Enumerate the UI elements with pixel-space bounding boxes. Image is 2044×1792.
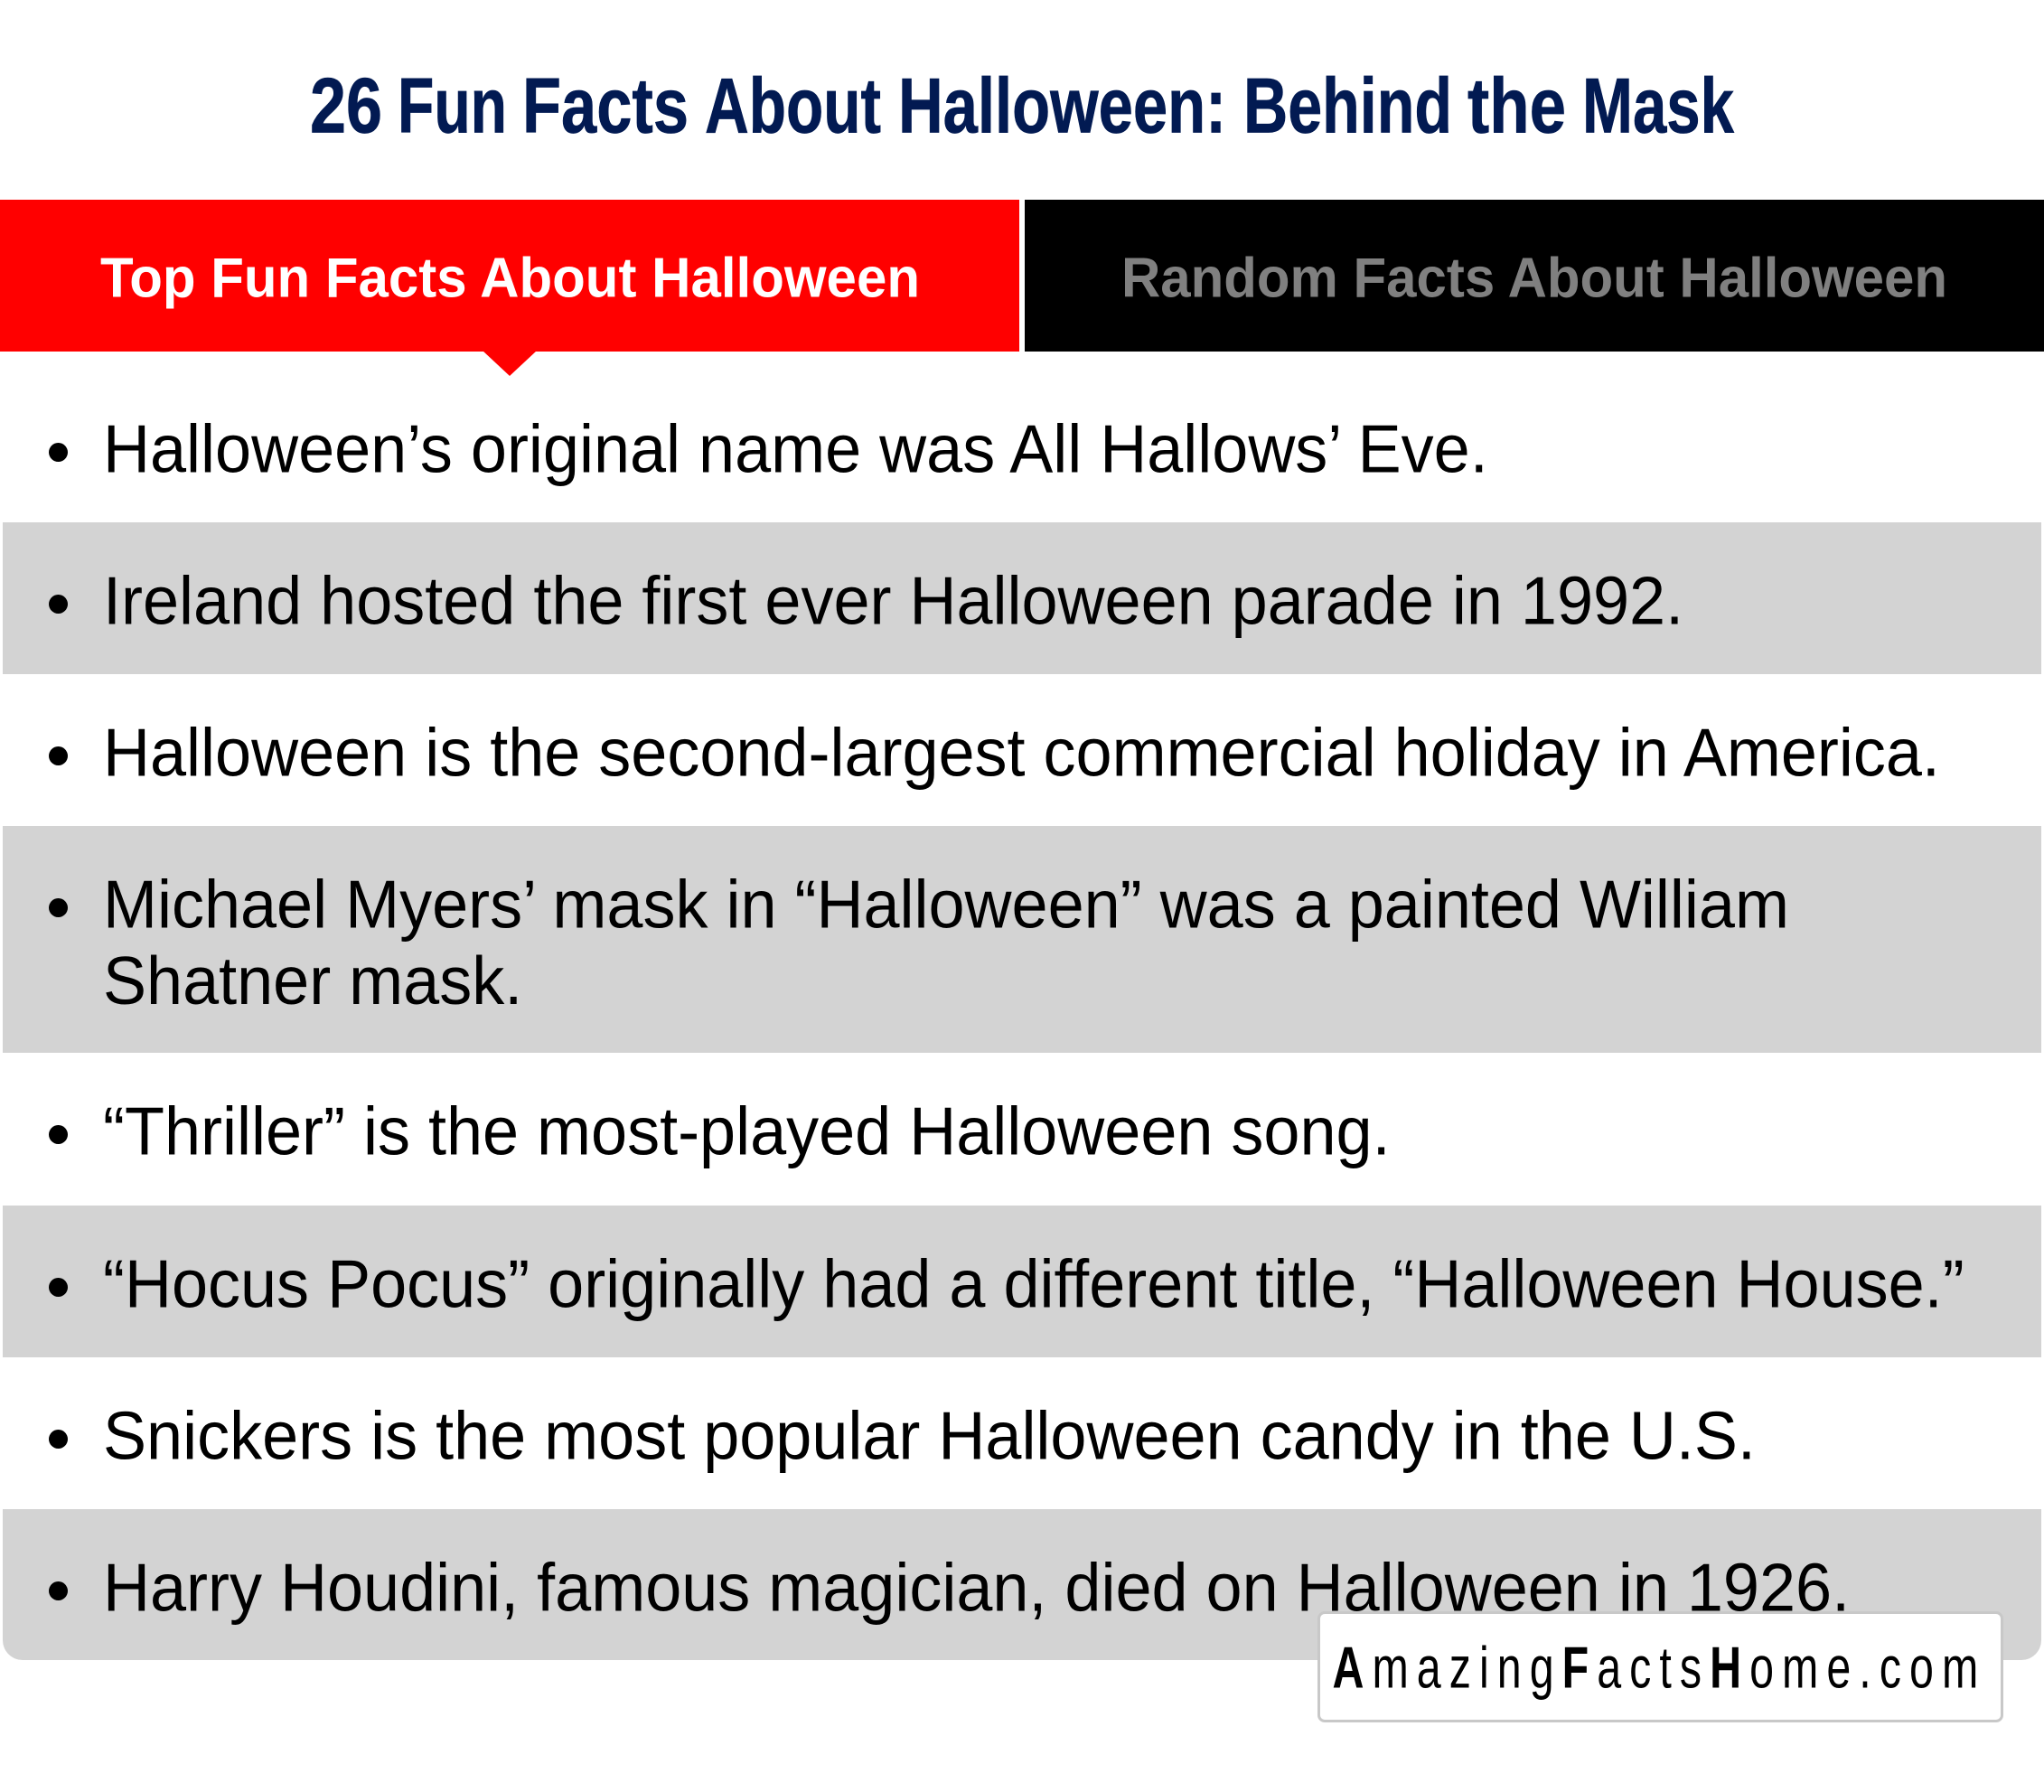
title: the xyxy=(1467,63,1566,150)
fact 7: Snickers is the most popular Halloween candy in the U.S. xyxy=(103,1399,1756,1474)
watermark badge: AmazingFactsHome.com xyxy=(1332,1635,1986,1701)
title: Mask xyxy=(1582,63,1734,150)
tab: random facts (inactive): Random Facts About Halloween xyxy=(1121,246,1947,309)
title: About xyxy=(705,63,881,150)
title: 26 xyxy=(310,63,382,150)
fact 4: Michael Myers’ mask in “Halloween” was a painted William xyxy=(103,868,1789,943)
title: Halloween: xyxy=(898,63,1226,150)
fact 4 xyxy=(49,868,1789,1018)
tab: top fun facts (active): Top Fun Facts About Halloween xyxy=(100,246,920,309)
title: Behind xyxy=(1243,63,1452,150)
fact 1: Halloween’s original name was All Hallows’ Eve. xyxy=(103,412,1488,487)
watermark badge xyxy=(1317,1610,2003,1722)
fact 3: Halloween is the second-largest commercial holiday in America. xyxy=(103,716,1940,791)
row background: fact 6 xyxy=(3,1206,2041,1357)
tab pointer arrow xyxy=(483,351,537,376)
row background: fact 4 xyxy=(3,826,2041,1053)
fact 2: Ireland hosted the first ever Halloween parade in 1992. xyxy=(103,564,1683,639)
fact 8: Harry Houdini, famous magician, died on Halloween in 1926. xyxy=(103,1551,1850,1626)
tab: top fun facts (active) xyxy=(0,200,1019,352)
title: Fun xyxy=(398,63,507,150)
row background: fact 8 xyxy=(3,1509,2041,1660)
title: Facts xyxy=(522,63,689,150)
tab: random facts (inactive) xyxy=(1025,200,2044,352)
fact 4: Shatner mask. xyxy=(103,943,522,1018)
fact 5: “Thriller” is the most-played Halloween song. xyxy=(103,1093,1391,1169)
title xyxy=(310,63,1735,150)
fact 6: “Hocus Pocus” originally had a different title, “Halloween House.” xyxy=(103,1247,1964,1322)
row background: fact 2 xyxy=(3,522,2041,674)
